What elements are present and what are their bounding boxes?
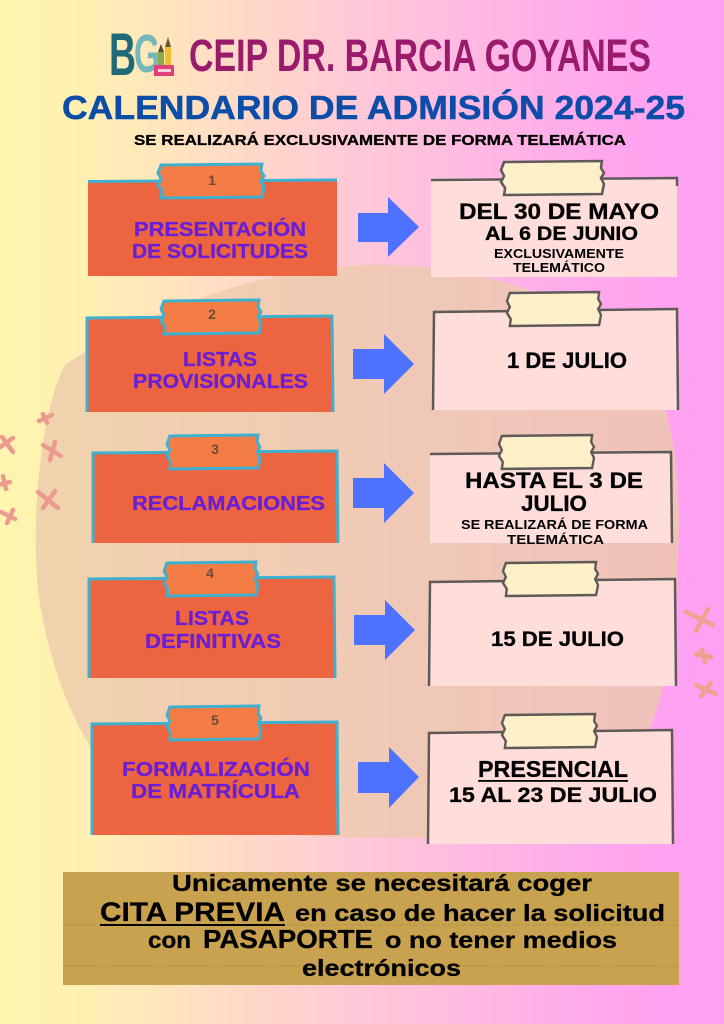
- panel: step 2: [87, 300, 333, 412]
- panel: step 3: 3: [211, 441, 219, 457]
- panel: date 3: [430, 435, 672, 547]
- subtitle: CALENDARIO DE ADMISIÓN 2024-25: [62, 89, 685, 126]
- panel: step 5: [92, 706, 338, 835]
- callout: cita previa: en caso de hacer la solicitud: [295, 900, 665, 926]
- logo: B: [109, 21, 136, 88]
- decorative crosses right: [686, 609, 716, 696]
- panel: step 2: PROVISIONALES: [133, 371, 308, 393]
- callout: cita previa: Unicamente se necesitará coger: [172, 870, 592, 896]
- panel: date 1: DEL 30 DE MAYO: [459, 199, 659, 224]
- panel: step 4: LISTAS: [175, 608, 249, 630]
- callout: cita previa: o no tener medios: [385, 927, 617, 953]
- panel: date 1: EXCLUSIVAMENTE: [494, 246, 624, 261]
- panel: date 1: AL 6 DE JUNIO: [485, 224, 638, 245]
- panel: date 5: [428, 714, 673, 844]
- panel: date 1: [431, 161, 677, 277]
- panel: step 4: DEFINITIVAS: [145, 631, 281, 653]
- panel: step 2: 2: [208, 306, 216, 322]
- panel: date 3: HASTA EL 3 DE: [465, 468, 643, 493]
- panel: step 3: [93, 435, 338, 543]
- panel: step 1: DE SOLICITUDES: [132, 241, 308, 263]
- panel: date 4: 15 DE JULIO: [491, 628, 624, 651]
- arrow 4: [354, 600, 415, 660]
- panel: date 5: 15 AL 23 DE JULIO: [449, 784, 657, 807]
- panel: step 3: RECLAMACIONES: [132, 493, 325, 515]
- callout: cita previa: CITA PREVIA: [100, 897, 285, 927]
- panel: date 1: TELEMÁTICO: [513, 260, 605, 275]
- arrow 2: [353, 334, 414, 394]
- logo: G: [134, 24, 160, 84]
- callout: cita previa: electrónicos: [302, 955, 461, 981]
- panel: step 4: [89, 562, 335, 678]
- panel: date 2: 1 DE JULIO: [507, 348, 627, 373]
- panel: step 5: FORMALIZACIÓN: [122, 757, 310, 781]
- decorative crosses left: [0, 414, 61, 523]
- panel: step 5: 5: [211, 712, 219, 728]
- arrow 5: [358, 747, 419, 808]
- note: SE REALIZARÁ EXCLUSIVAMENTE DE FORMA TELEMÁTICA: [134, 132, 626, 149]
- panel: date 5: PRESENCIAL: [478, 756, 628, 782]
- panel: step 2: LISTAS: [183, 349, 257, 371]
- panel: date 3: JULIO: [521, 491, 587, 516]
- panel: step 1: 1: [208, 172, 216, 188]
- callout: cita previa: [63, 870, 679, 985]
- panel: step 1: [88, 164, 337, 276]
- callout: cita previa: con: [148, 927, 191, 953]
- panel: date 3: SE REALIZARÁ DE FORMA: [461, 517, 649, 532]
- arrow 1: [358, 197, 419, 257]
- panel: step 5: DE MATRÍCULA: [131, 780, 300, 803]
- panel: step 1: PRESENTACIÓN: [134, 217, 306, 241]
- panel: step 4: 4: [206, 565, 214, 581]
- panel: date 4: [429, 562, 676, 686]
- callout: cita previa: PASAPORTE: [203, 924, 373, 954]
- panel: date 3: TELEMÁTICA: [507, 532, 605, 547]
- panel: date 2: [433, 292, 678, 410]
- logo: [109, 21, 174, 88]
- arrow 3: [353, 463, 414, 523]
